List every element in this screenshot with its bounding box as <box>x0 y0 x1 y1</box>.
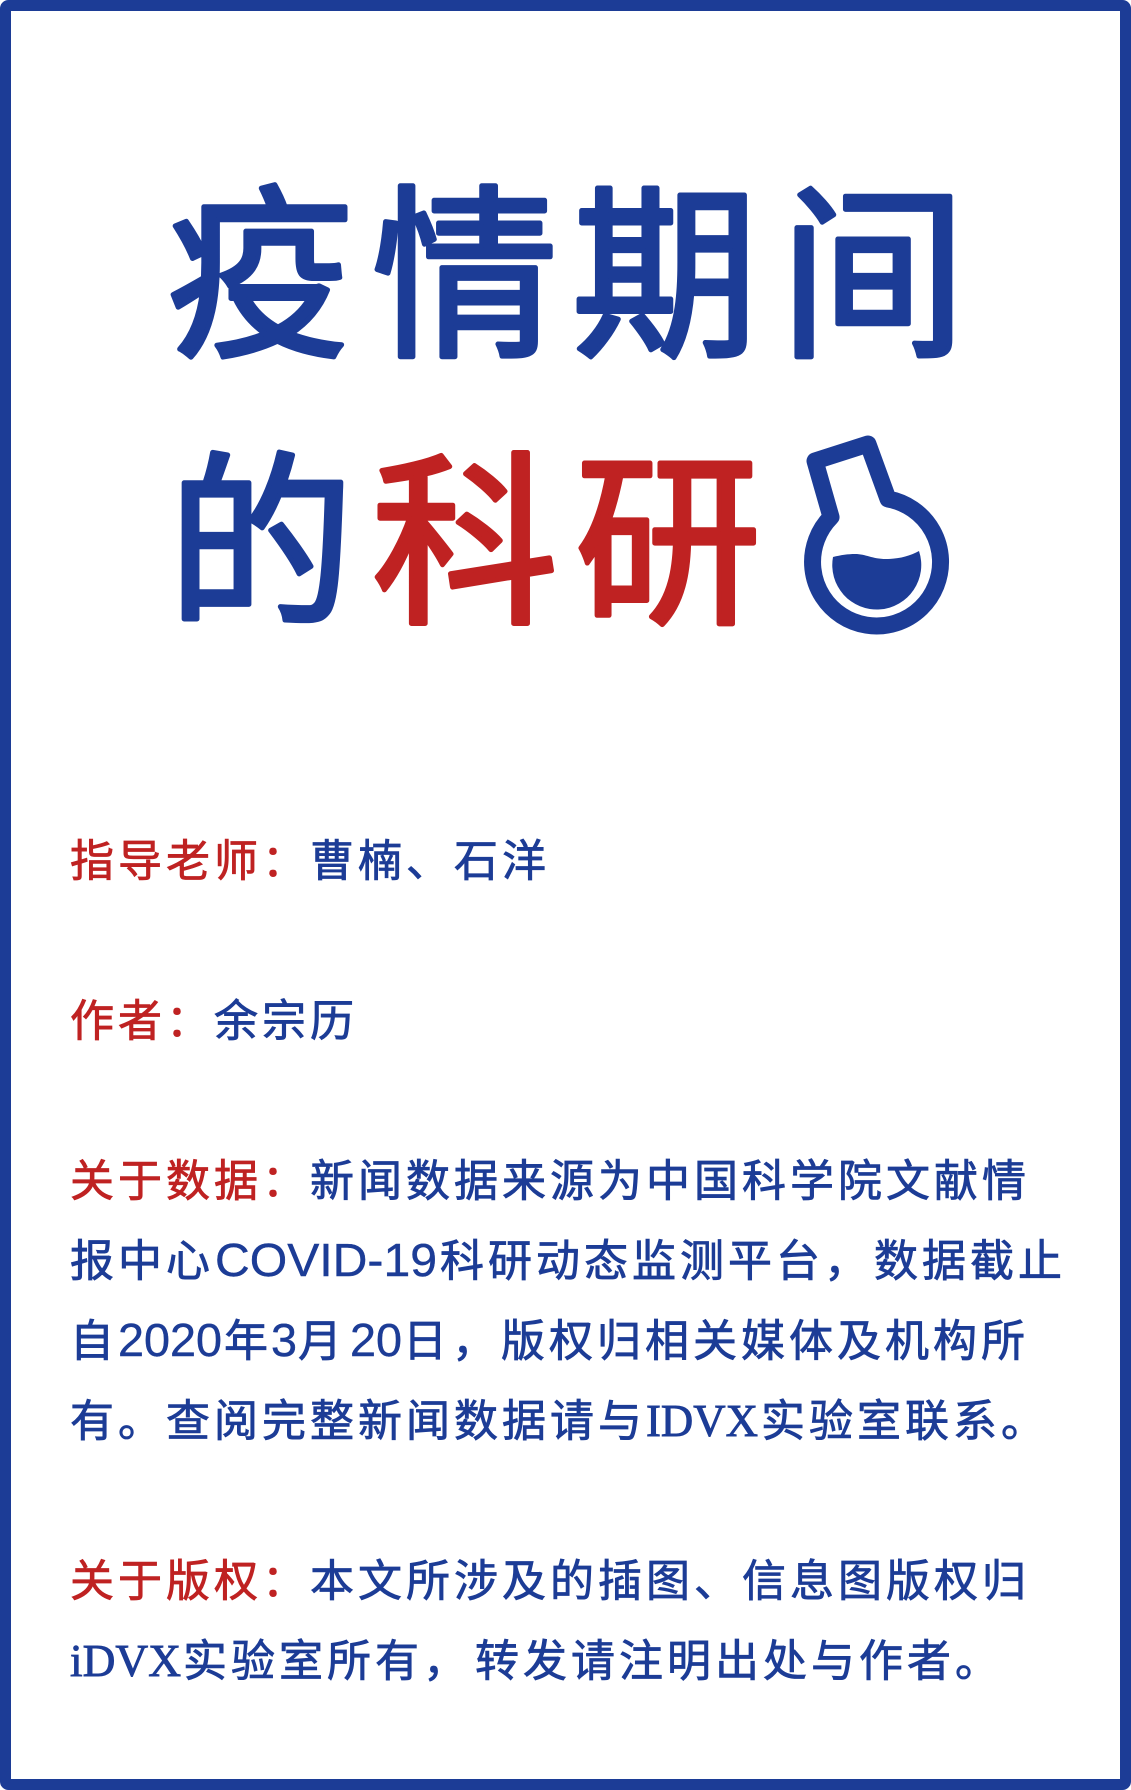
credit: author <box>70 985 358 1049</box>
text block: about the data: 日 <box>403 1305 451 1369</box>
text block: about the data: 有。 <box>70 1385 166 1449</box>
text block: about the data: 年 <box>224 1305 272 1369</box>
title line 2: 研 <box>575 393 761 663</box>
text block: about the copyright: 实验室所有， <box>183 1625 471 1689</box>
text block: about the copyright: 本文所涉及的插图、信息图版权归 <box>310 1545 1030 1609</box>
title line 2: 的 <box>168 393 354 663</box>
credit: advisors: 曹楠、石洋 <box>310 825 550 889</box>
credit: author: 余宗历 <box>214 985 358 1049</box>
text block: about the data: 新闻数据来源为中国科学院文献情 <box>310 1145 1030 1209</box>
title line 1: 间 <box>780 126 966 396</box>
text block: about the data: 报中心 <box>70 1225 214 1289</box>
title line 1: 疫 <box>167 126 353 396</box>
title line 1 <box>167 126 966 396</box>
credit: advisors: 指导老师： <box>70 825 310 889</box>
title line 1: 情 <box>372 126 558 396</box>
text block: about the data: 科研动态监测平台， <box>440 1225 872 1289</box>
title line 2: 科 <box>372 393 558 663</box>
text block: about the data: IDVX <box>646 1395 758 1446</box>
title <box>167 126 966 663</box>
text block: about the data: 关于数据： <box>70 1145 310 1209</box>
text block: about the copyright: iDVX <box>70 1635 181 1686</box>
title line 1: 期 <box>572 126 758 396</box>
text block: about the data: 版权归相关媒体及机构所 <box>501 1305 1029 1369</box>
text block: about the copyright: 转发请注明出处与作者。 <box>475 1625 1003 1689</box>
text block: about the copyright: 关于版权： <box>70 1545 310 1609</box>
text block: about the data: 20 <box>350 1314 402 1366</box>
text block: about the data: 数据截止 <box>874 1225 1066 1289</box>
icon: flask <box>813 444 941 626</box>
text block: about the data: 2020 <box>118 1314 222 1366</box>
text block: about the data: 查阅完整新闻数据请与 <box>166 1385 646 1449</box>
text block: about the data: 月 <box>298 1305 346 1369</box>
text block: about the copyright <box>70 1545 1030 1689</box>
title line 2 <box>168 393 761 663</box>
text block: about the data: 3 <box>271 1314 297 1366</box>
credit: author: 作者： <box>70 985 214 1049</box>
text block: about the data: 自 <box>70 1305 118 1369</box>
credit: advisors <box>70 825 550 889</box>
text block: about the data <box>70 1145 1066 1449</box>
text block: about the data: COVID-19 <box>215 1234 437 1286</box>
text block: about the data: ， <box>452 1305 500 1369</box>
text block: about the data: 实验室联系。 <box>761 1385 1049 1449</box>
